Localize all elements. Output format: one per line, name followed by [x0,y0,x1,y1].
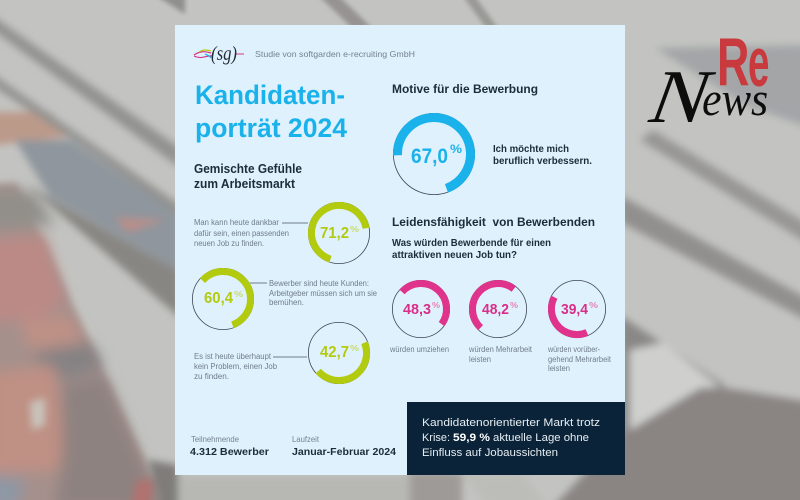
logo: softgarden [194,43,244,65]
stat: duration [292,434,396,458]
subheading: question [392,238,551,261]
donut: 71,2 percent: % [350,224,360,234]
donut: 42,7 percent: % [350,343,360,353]
donut: 60,4 percent: 60,4 [204,290,233,307]
heading: mixed feelings: zum Arbeitsmarkt [194,177,296,191]
heading: motives: Motive für die Bewerbung [392,82,538,96]
callout: market summary: Einfluss auf Jobaussichten [422,447,558,459]
donut: 48,3 percent: 48,3 [403,301,431,318]
text block: 42,7 statement: zu finden. [194,372,229,381]
text block: motive statement: beruflich verbessern. [493,156,592,167]
donut: 39,4 percent: 39,4 [561,301,589,318]
stat: participants: Teilnehmende [191,434,239,444]
donut: 39,4 percent [544,276,610,342]
logo: Re News: e [748,23,769,101]
callout: market summary: 59,9 % [453,432,490,444]
callout: market summary: Krise: [422,432,450,444]
donut: 71,2 percent [304,198,374,268]
heading: mixed feelings: Gemischte Gefühle [194,162,302,176]
stat: participants: 4.312 Bewerber [190,446,269,458]
label: relocate: würden umziehen [389,345,449,354]
donut: 60,4 percent: % [234,289,244,299]
callout: market summary: Kandidatenorientierter Markt trotz [422,417,600,429]
label: overtime: leisten [469,355,491,364]
text block: 42,7 statement [194,352,278,381]
donut: 48,3 percent: % [432,301,440,310]
donut: 48,2 percent [462,273,534,345]
donut: 42,7 percent [303,317,375,389]
logo: softgarden: (sg) [211,43,237,65]
stat: participants [190,434,269,458]
text block: 71,2 statement: Man kann heute dankbar [194,218,279,227]
stat: duration: Laufzeit [292,434,320,444]
text block: 71,2 statement [194,218,289,248]
logo: Re News: ews [702,72,768,125]
donut: 67,0 percent: % [450,142,462,156]
logo: Re News [639,23,769,138]
donut: 48,2 percent: % [510,301,518,310]
logo: Re News: R [717,25,749,100]
text block: 60,4 statement [269,279,378,307]
title: Kandidaten- [195,80,345,110]
text block: 60,4 statement: Arbeitgeber müssen sich um sie [269,289,378,298]
donut: 42,7 percent: 42,7 [320,344,349,361]
label: temporary overtime: gehend Mehrarbeit [548,355,612,364]
text block: 60,4 statement: bemühen. [269,298,304,307]
text block: 71,2 statement: dafür sein, einen passenden [194,229,289,238]
text block: 42,7 statement: Es ist heute überhaupt [194,352,272,361]
donut: 67,0 percent: 67,0 [411,145,448,168]
label: temporary overtime [547,345,612,373]
subheading: question: attraktiven neuen Job tun? [392,250,517,261]
donut: 48,3 percent [385,273,457,345]
text block: motive statement: Ich möchte mich [493,144,569,155]
text block: 60,4 statement: Bewerber sind heute Kunden: [269,279,369,288]
panel: infographic card [175,25,625,475]
subheading: question: Was würden Bewerbende für einen [392,238,551,249]
subtitle: study credit: Studie von softgarden e-recruiting GmbH [255,49,415,59]
title [195,80,347,143]
text block: 71,2 statement: neuen Job zu finden. [194,239,264,248]
label: overtime: würden Mehrarbeit [468,345,533,354]
donut: 71,2 percent: 71,2 [320,225,349,242]
label: overtime [468,345,533,364]
heading: endurance: Leidensfähigkeit von Bewerbenden [392,215,595,229]
callout: market summary [407,402,625,475]
donut: 67,0 percent [393,113,475,195]
logo: Re News: N [639,54,725,138]
label: temporary overtime: leisten [548,364,570,373]
text block: 42,7 statement: kein Problem, einen Job [194,362,278,371]
label: temporary overtime: würden vorüber- [547,345,600,354]
heading: mixed feelings [194,162,302,191]
callout: market summary: aktuelle Lage ohne [493,432,589,444]
stat: duration: Januar-Februar 2024 [292,446,396,458]
donut: 48,2 percent: 48,2 [482,301,509,318]
donut: 60,4 percent [184,260,262,338]
title: porträt 2024 [195,113,347,143]
donut: 39,4 percent: % [589,301,598,310]
text block: motive statement [493,144,592,167]
